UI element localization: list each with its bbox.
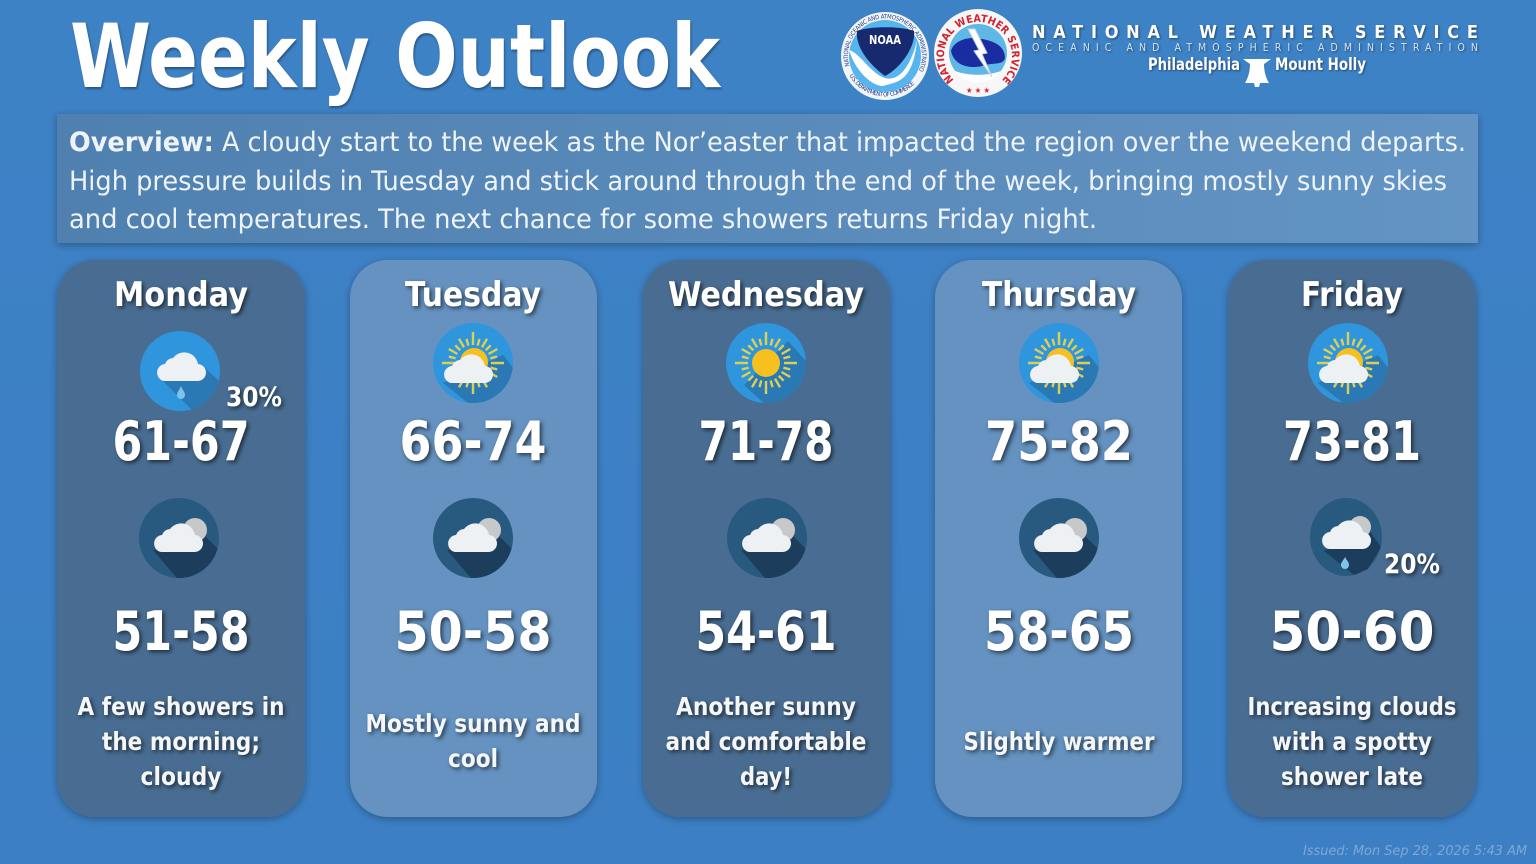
panel: Friday: Increasing clouds (1248, 692, 1456, 721)
icon: partly sunny (433, 323, 533, 423)
logo: NOAA: NATIONAL OCEANIC AND ATMOSPHERIC ADMINISTRATION (844, 14, 926, 72)
panel: Friday: 50-60 (1270, 600, 1434, 663)
logo: National Weather Service: NATIONAL WEATHER SERVICE (936, 14, 1020, 85)
logo: NOAA (841, 12, 929, 100)
panel: Monday: 61-67 (112, 410, 250, 473)
panel: Monday: Monday (114, 275, 248, 315)
panel: Monday (57, 260, 305, 817)
panel: Thursday (935, 260, 1182, 817)
icon: liberty bell (1243, 59, 1271, 87)
icon: cloudy night with rain (1310, 498, 1382, 576)
panel: Monday: 30% (226, 382, 282, 413)
panel: Wednesday: Another sunny (676, 692, 856, 721)
panel: Friday (1228, 260, 1476, 817)
panel: Monday: the morning; (102, 727, 260, 756)
panel: Tuesday: 66-74 (400, 410, 546, 473)
panel: Wednesday: day! (740, 762, 792, 791)
agency name: OCEANIC AND ATMOSPHERIC ADMINISTRATION (1032, 42, 1478, 54)
icon: cloudy night (727, 498, 817, 598)
panel: Tuesday (350, 260, 597, 817)
issued timestamp: Issued: Mon Sep 28, 2026 5:43 AM (1303, 844, 1527, 859)
panel: Thursday: Slightly warmer (964, 727, 1155, 756)
agency name: Mount Holly (1275, 55, 1366, 75)
icon: partly sunny (1308, 323, 1408, 423)
overview panel: High pressure builds in Tuesday and stick around through the end of the week, bringing mostly sunny skies (69, 166, 1447, 197)
icon: cloudy night (433, 498, 523, 598)
icon: cloudy night (139, 498, 229, 598)
icon: cloudy night (1019, 498, 1109, 598)
overview panel: Overview: A cloudy start to the week as the Nor’easter that impacted the region over the weekend departs. (69, 127, 1466, 158)
panel: Wednesday: 71-78 (698, 410, 834, 473)
panel: Tuesday: 50-58 (394, 600, 552, 663)
panel: Monday: cloudy (140, 762, 222, 791)
icon: cloud with rain (140, 331, 220, 411)
panel: Friday: shower late (1281, 762, 1423, 791)
overview panel (57, 114, 1478, 243)
panel: Monday: A few showers in (78, 692, 284, 721)
panel: Friday: 20% (1384, 549, 1440, 580)
panel: Tuesday: Mostly sunny and (366, 709, 580, 738)
panel: Wednesday: Wednesday (668, 275, 864, 315)
panel: Monday: 51-58 (112, 600, 250, 663)
stars: ★ ★ ★ (966, 86, 990, 95)
icon: partly sunny (1019, 323, 1119, 423)
title: Weekly Outlook (70, 5, 722, 108)
panel: Wednesday: 54-61 (696, 600, 836, 663)
panel: Wednesday (643, 260, 890, 817)
panel: Tuesday: cool (448, 744, 498, 773)
panel: Friday: Friday (1301, 275, 1403, 315)
panel: Wednesday: and comfortable (666, 727, 866, 756)
agency name (1032, 22, 1478, 75)
overview panel: and cool temperatures. The next chance for some showers returns Friday night. (69, 204, 1097, 235)
logo: NOAA: NOAA (869, 33, 902, 47)
panel: Thursday: 58-65 (984, 600, 1134, 663)
panel: Thursday: Thursday (982, 275, 1136, 315)
icon: sunny (726, 323, 826, 423)
agency name: Philadelphia (1148, 55, 1240, 75)
logo: NOAA: U.S. DEPARTMENT OF COMMERCE (850, 74, 914, 96)
panel: Friday: with a spotty (1272, 727, 1432, 756)
panel: Thursday: 75-82 (985, 410, 1133, 473)
panel: Tuesday: Tuesday (405, 275, 541, 315)
panel: Friday: 73-81 (1283, 410, 1421, 473)
agency name: NATIONAL WEATHER SERVICE (1032, 22, 1478, 43)
